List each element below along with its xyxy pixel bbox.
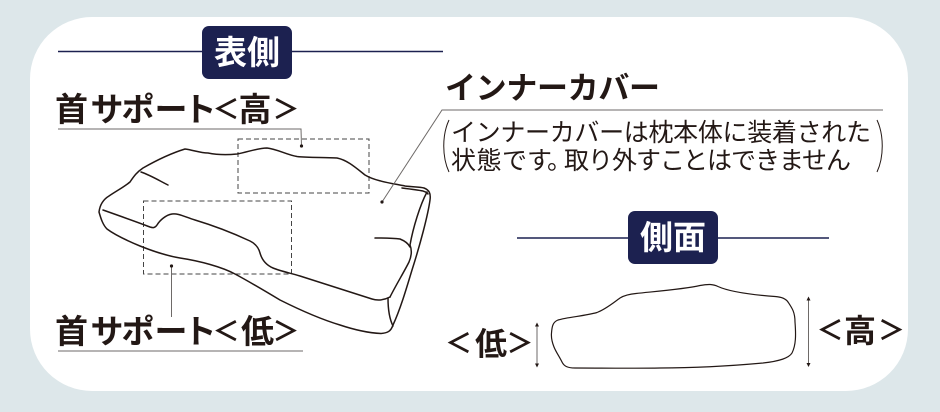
label: neck support low <box>55 264 303 351</box>
heading: side view <box>517 211 829 264</box>
label: neck support high: ＜ <box>212 95 240 125</box>
leader: inner cover <box>380 110 883 204</box>
label: high: 高 <box>844 313 876 349</box>
dashed box: low neck area <box>144 201 292 274</box>
label: neck support low: 低 <box>241 313 274 350</box>
label: low: ＞ <box>506 329 534 359</box>
label: neck support low: ＜ <box>212 317 240 347</box>
label: high: ＜ <box>816 316 844 346</box>
label: low: ＜ <box>445 329 472 359</box>
arrow: high height <box>806 296 810 367</box>
illustration: pillow side profile <box>551 284 796 368</box>
illustration: pillow <box>99 148 430 334</box>
label: neck support high: 高 <box>238 91 272 128</box>
dashed box: high neck area <box>238 139 369 193</box>
heading: side view: 側面 <box>640 219 706 256</box>
label: neck support low: 首サポート <box>55 313 216 350</box>
label: neck support high: ＞ <box>272 95 300 125</box>
label: low: 低 <box>475 326 507 362</box>
label: neck support high <box>55 91 303 148</box>
heading: inner cover: インナーカバー <box>445 71 660 106</box>
heading: front side: 表側 <box>214 34 280 71</box>
text block: inner cover description <box>444 119 882 175</box>
arrow: low height <box>535 322 539 368</box>
text block: inner cover description: 状態です。取り外すことはできません <box>451 147 851 175</box>
label: neck support high: 首サポート <box>55 91 216 128</box>
label: neck support low: ＞ <box>272 317 300 347</box>
heading: front side <box>58 26 443 79</box>
label: high: ＞ <box>878 316 905 346</box>
text block: inner cover description: インナーカバーは枕本体に装着された <box>451 119 871 147</box>
